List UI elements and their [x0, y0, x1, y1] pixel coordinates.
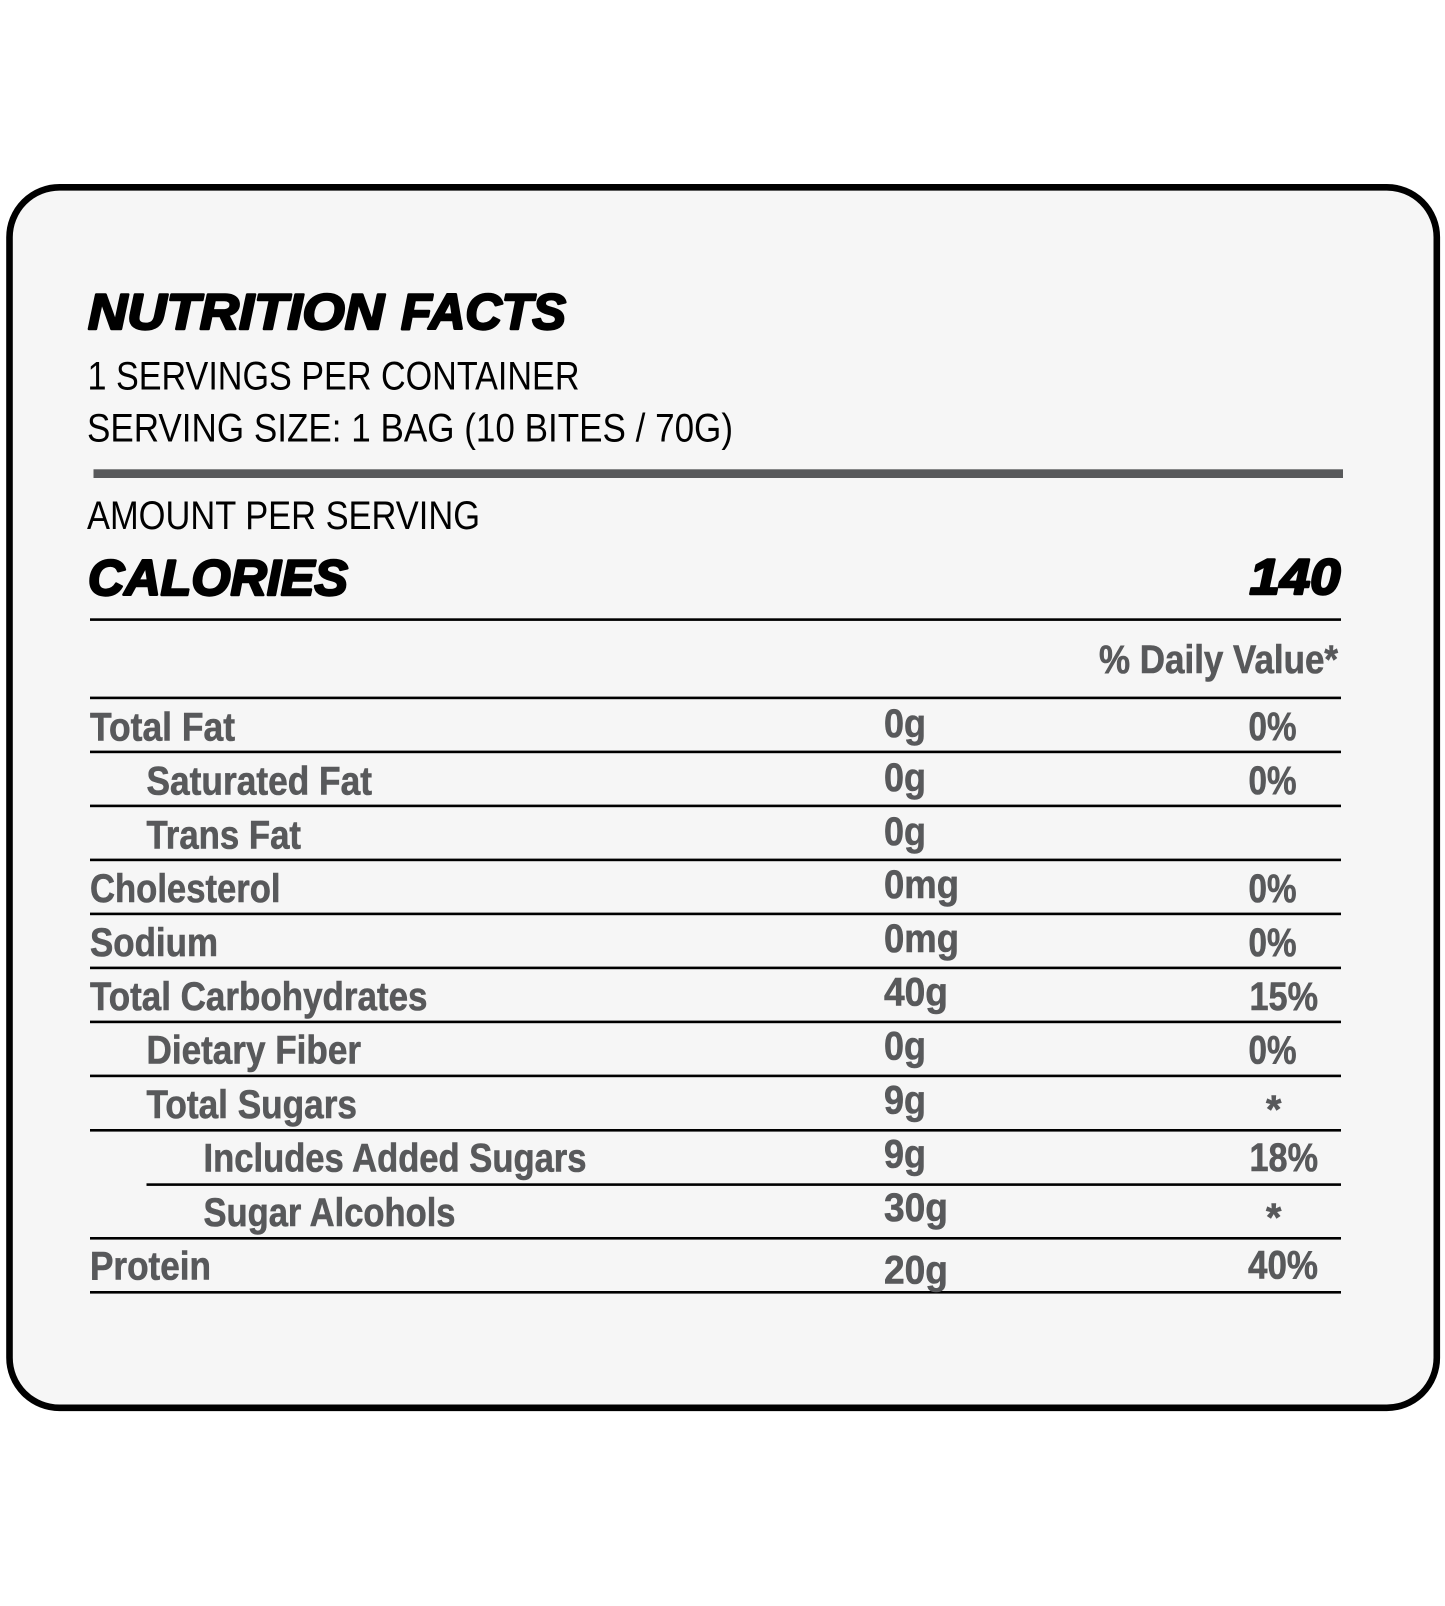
column header: percent daily value: % Daily Value*	[1099, 638, 1339, 682]
row: sugar alcohols: 30g	[884, 1186, 948, 1230]
row: cholesterol	[90, 863, 1296, 911]
row: total sugars: *	[1266, 1088, 1282, 1132]
row: protein: 40%	[1248, 1244, 1318, 1288]
row: trans fat	[146, 810, 926, 858]
row: total fat: 0g	[884, 702, 926, 746]
value: calories: 140	[1250, 549, 1341, 605]
row: total carbohydrates	[90, 970, 1318, 1019]
row: sodium	[90, 917, 1296, 965]
row: trans fat: Trans Fat	[146, 814, 301, 858]
row: cholesterol: Cholesterol	[90, 867, 280, 911]
row: saturated fat: 0%	[1248, 759, 1296, 803]
row: dietary fiber: 0%	[1248, 1029, 1296, 1073]
row: sugar alcohols: Sugar Alcohols	[204, 1191, 456, 1235]
text: servings per container: 1 SERVINGS PER CONTAINER	[88, 355, 580, 399]
row: saturated fat: 0g	[884, 756, 926, 800]
table rules	[90, 618, 1341, 1294]
row: cholesterol: 0%	[1248, 867, 1296, 911]
row: total fat: 0%	[1248, 705, 1296, 749]
row: dietary fiber	[146, 1024, 1296, 1073]
thick divider	[94, 469, 1343, 478]
row: includes added sugars: 9g	[884, 1132, 926, 1176]
row: sugar alcohols	[204, 1186, 1282, 1240]
row: total sugars: Total Sugars	[146, 1083, 357, 1127]
row: includes added sugars: 18%	[1250, 1136, 1318, 1180]
text: serving size: SERVING SIZE: 1 BAG (10 BITES / 70G)	[87, 406, 733, 450]
title: NUTRITION	[88, 284, 385, 340]
row: total sugars: 9g	[884, 1078, 926, 1122]
row: total sugars	[146, 1078, 1282, 1132]
row: cholesterol: 0mg	[884, 863, 959, 907]
heading: calories: CALORIES	[88, 550, 348, 606]
title	[88, 284, 566, 340]
row: saturated fat	[146, 756, 1296, 804]
row: protein: Protein	[90, 1244, 211, 1288]
row: saturated fat: Saturated Fat	[146, 760, 372, 804]
row: total carbohydrates: Total Carbohydrates	[90, 975, 428, 1019]
row: total fat: Total Fat	[90, 706, 235, 750]
row: protein: 20g	[884, 1248, 948, 1292]
row: dietary fiber: Dietary Fiber	[146, 1029, 361, 1073]
text: amount per serving: AMOUNT PER SERVING	[87, 494, 480, 538]
row: protein	[90, 1244, 1318, 1292]
row: includes added sugars: Includes Added Sugars	[204, 1137, 586, 1181]
row: sodium: 0mg	[884, 917, 959, 961]
row: trans fat: 0g	[884, 810, 926, 854]
row: total fat	[90, 702, 1296, 750]
row: dietary fiber: 0g	[884, 1024, 926, 1068]
row: sodium: 0%	[1248, 921, 1296, 965]
row: includes added sugars	[204, 1132, 1318, 1181]
row: total carbohydrates: 40g	[884, 970, 948, 1014]
row: sodium: Sodium	[90, 921, 218, 965]
row: sugar alcohols: *	[1266, 1196, 1282, 1240]
row: total carbohydrates: 15%	[1250, 975, 1318, 1019]
title: FACTS	[401, 284, 566, 340]
panel: nutrition card	[10, 187, 1437, 1408]
